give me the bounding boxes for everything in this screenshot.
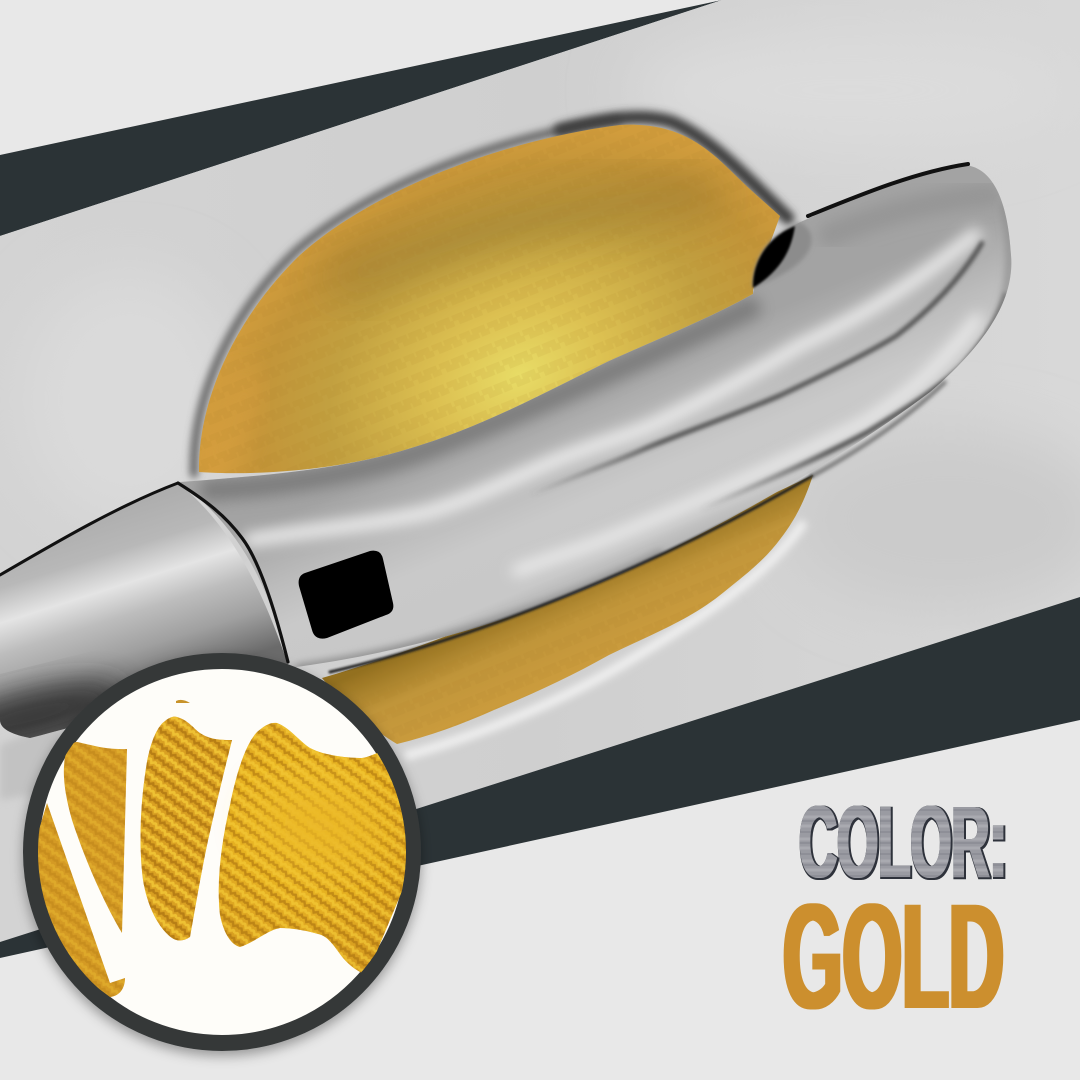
cover shadow <box>0 661 128 738</box>
finger hole <box>753 222 812 288</box>
recess shadow <box>194 117 788 474</box>
door handle <box>0 164 1011 763</box>
photo: right sticker <box>219 723 415 975</box>
lower recess rim highlight <box>405 522 804 756</box>
detail circle <box>30 661 415 1043</box>
handle cover left <box>0 483 288 738</box>
lower dark diagonal band <box>0 597 1080 958</box>
seam lines <box>0 164 968 672</box>
top dark diagonal band <box>0 0 722 236</box>
gold upper recess <box>199 125 780 473</box>
handle cap grip <box>180 165 1011 668</box>
photo: middle sticker <box>141 700 232 941</box>
grip highlights and creases <box>210 195 1010 668</box>
photo: left sticker <box>64 742 127 933</box>
photo: bottom-left sticker <box>30 803 125 997</box>
gold lower recess <box>322 475 813 744</box>
circle ring <box>31 661 413 1043</box>
keyhole button <box>299 551 393 639</box>
